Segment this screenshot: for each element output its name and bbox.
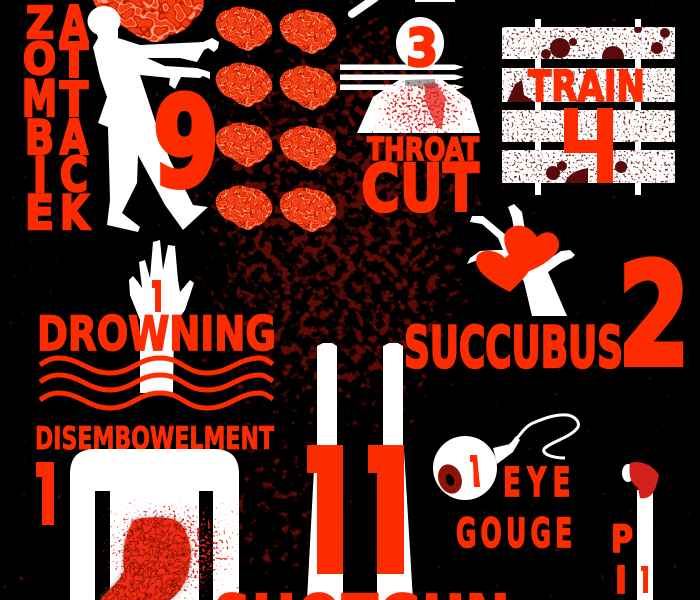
number: 4: 4 bbox=[560, 88, 618, 208]
label: TRAIN: TRAIN bbox=[528, 62, 645, 112]
grid of nine brains bbox=[216, 6, 336, 232]
icon: railway track bbox=[502, 19, 675, 195]
number: 4 bbox=[564, 108, 613, 183]
heading: ATTACK: K bbox=[60, 186, 90, 241]
label: DISEMBOWELMENT: DISEMBOWELMENT bbox=[35, 421, 274, 457]
icon: throat-cut figure bbox=[340, 17, 480, 142]
heading: ZOMBIE: E bbox=[25, 186, 54, 241]
icon: eyeball bbox=[433, 415, 578, 500]
heading: ATTACK: C bbox=[60, 148, 88, 203]
icon: bloody pipe bbox=[622, 462, 659, 600]
heading: ATTACK: T bbox=[60, 34, 88, 89]
label: GOUGE: GOUGE bbox=[456, 510, 577, 557]
heading: ATTACK: T bbox=[60, 73, 88, 128]
number: 3: 3 bbox=[406, 19, 438, 79]
icon: three waves bbox=[40, 358, 273, 408]
number: 1: 1 bbox=[466, 447, 484, 496]
icon: disembowelled torso bbox=[70, 449, 240, 600]
heading: ZOMBIE: M bbox=[22, 70, 57, 128]
heading: ZOMBIE bbox=[22, 0, 57, 241]
number: 1: 1 bbox=[147, 270, 168, 322]
icon: two legs bbox=[307, 343, 413, 600]
number: 11 bbox=[307, 445, 404, 574]
heading: ZOMBIE: O bbox=[23, 34, 56, 85]
heading: ATTACK: A bbox=[60, 111, 88, 166]
heading: ZOMBIE: B bbox=[25, 111, 54, 166]
number: 1 bbox=[641, 566, 648, 593]
label: EYE: EYE bbox=[503, 459, 577, 505]
bone fragment top bbox=[352, 0, 455, 14]
number: 1: 1 bbox=[26, 445, 62, 545]
number: 1 bbox=[36, 462, 54, 525]
label: THROAT: THROAT bbox=[367, 132, 479, 168]
icon: zombie hand bbox=[467, 204, 575, 316]
heading: ZOMBIE: I bbox=[33, 148, 47, 204]
label: DROWNING: DROWNING bbox=[37, 307, 276, 362]
number: 9: 9 bbox=[153, 71, 219, 215]
large brain behind zombie head bbox=[90, 0, 204, 42]
label: CUT: CUT bbox=[361, 150, 479, 227]
heading: ATTACK bbox=[60, 0, 90, 241]
icon: hearts bbox=[476, 226, 559, 292]
number: 1 bbox=[152, 280, 161, 312]
label: P I bbox=[611, 518, 633, 600]
label: P I: P bbox=[611, 518, 633, 561]
icon: zombie silhouette bbox=[88, 6, 219, 232]
icon: drowning hand bbox=[129, 240, 194, 393]
number: 1 bbox=[470, 455, 480, 487]
